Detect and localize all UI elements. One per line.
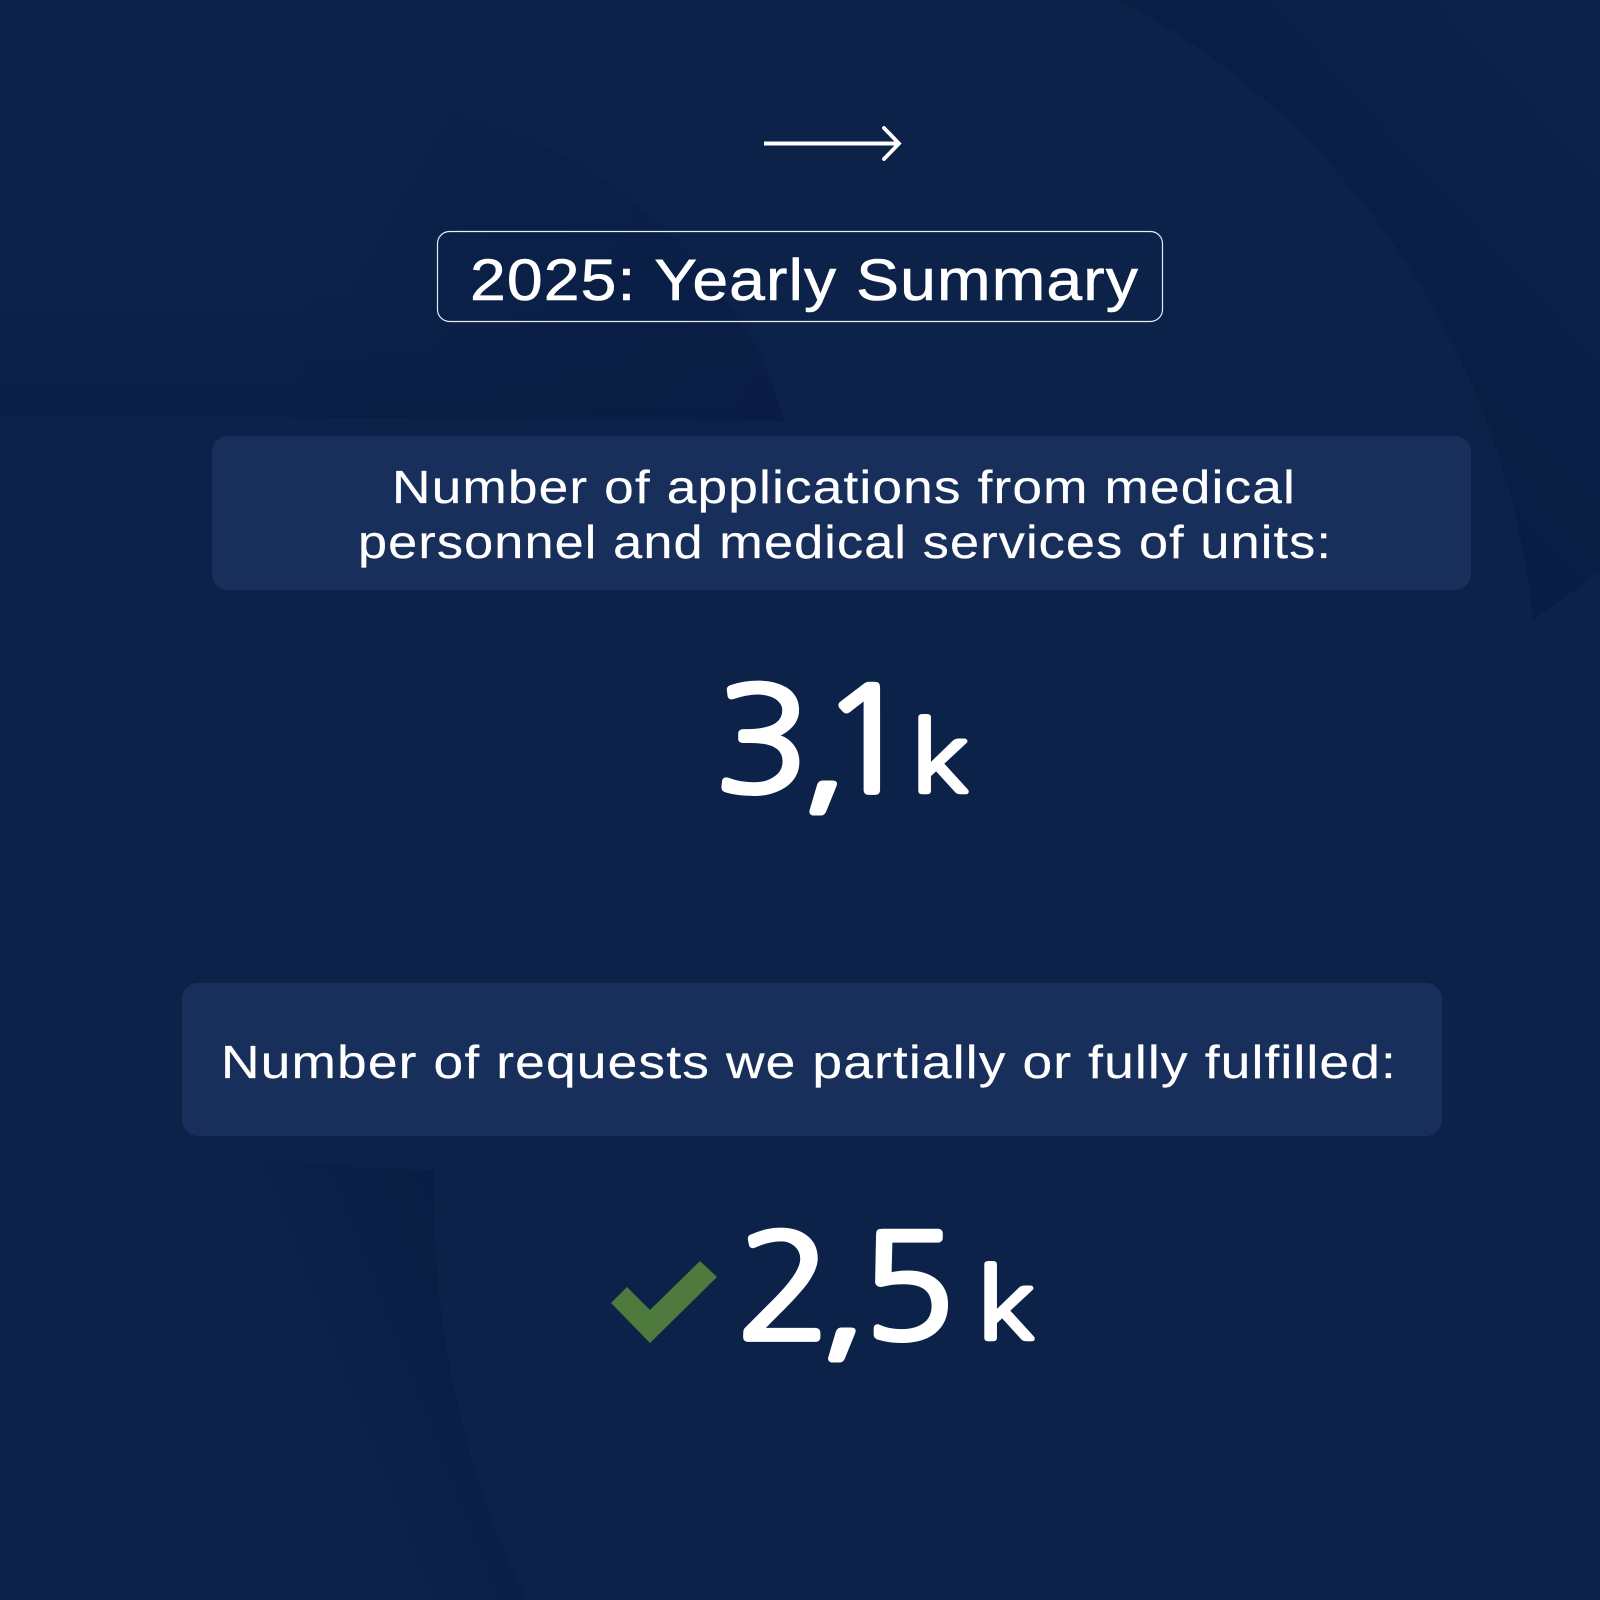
panel text: Number of applications from medical <box>392 461 1296 513</box>
icon: green check <box>611 1261 717 1343</box>
icon: arrow <box>764 128 899 159</box>
unit k: k <box>976 1258 1036 1354</box>
title text: 2025: Yearly Summary <box>470 248 1139 313</box>
number: 2,5 k with check <box>611 1215 1036 1360</box>
title box <box>438 232 1162 322</box>
panel: requests <box>182 983 1442 1136</box>
number: 3,1 k: 3,1 <box>714 668 915 813</box>
panel text: Number of requests we partially or fully fulfilled: <box>221 1036 1397 1088</box>
panel: applications <box>212 436 1471 590</box>
value: 2,5 <box>736 1215 957 1360</box>
panel text: personnel and medical services of units: <box>358 516 1332 568</box>
unit k: k <box>910 711 970 807</box>
